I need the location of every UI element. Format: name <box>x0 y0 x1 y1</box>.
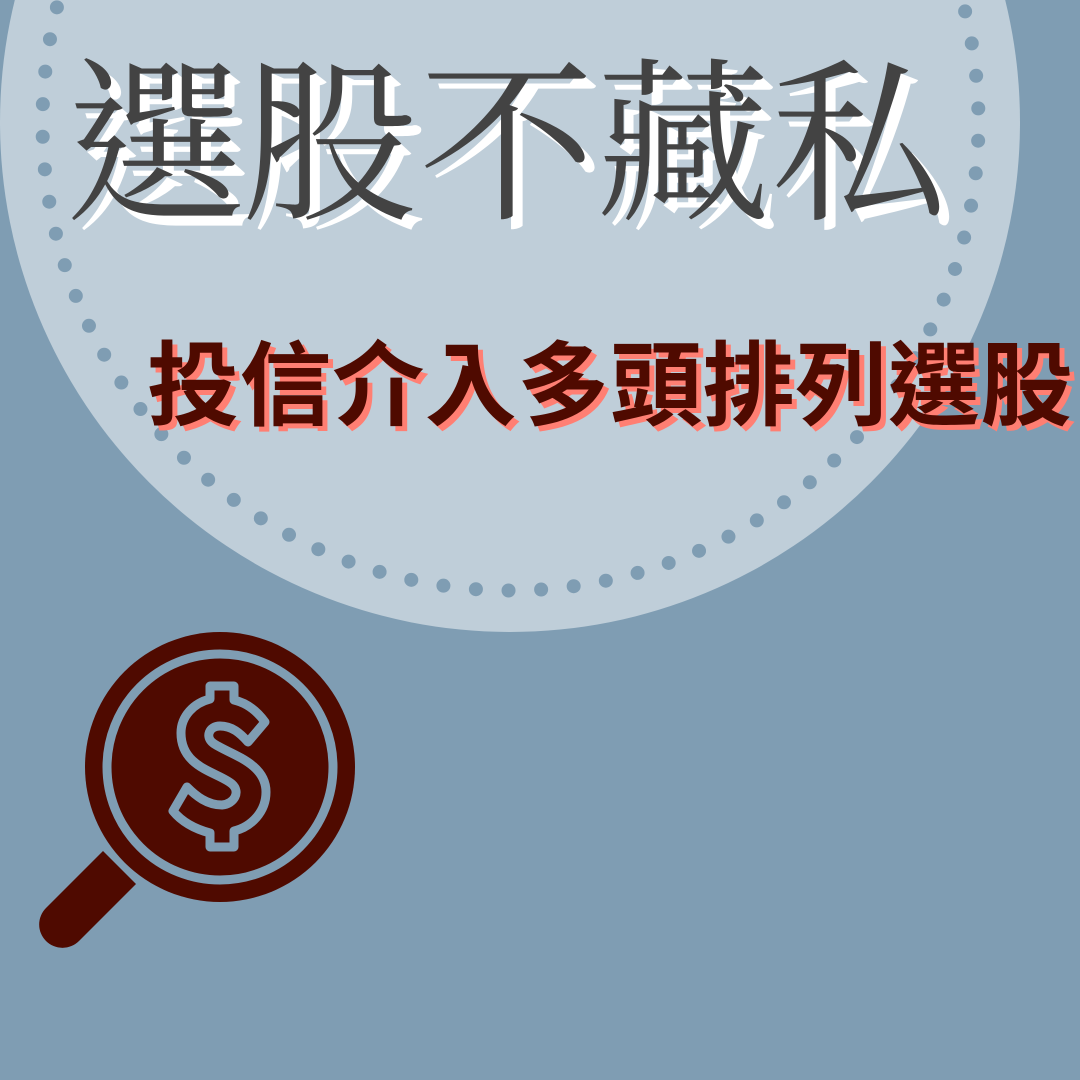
subtitle: 投信介入多頭排列選股 <box>147 336 1073 438</box>
title: 選股不藏私 <box>67 50 947 245</box>
